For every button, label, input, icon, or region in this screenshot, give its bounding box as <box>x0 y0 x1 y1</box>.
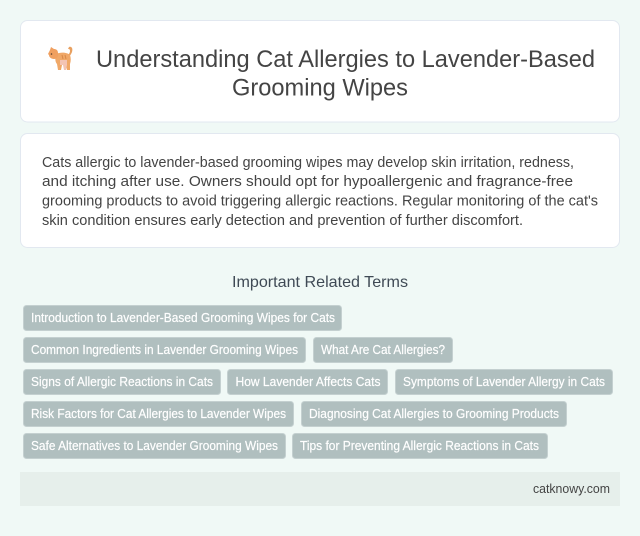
footer <box>20 472 620 506</box>
tag: How Lavender Affects Cats <box>236 375 380 389</box>
footer: catknowy.com <box>533 482 610 496</box>
text block: summary <box>42 155 598 229</box>
tag: Symptoms of Lavender Allergy in Cats <box>403 375 605 389</box>
tag: Safe Alternatives to Lavender Grooming Wipes <box>31 439 278 453</box>
tag: Common Ingredients in Lavender Grooming Wipes <box>31 343 298 357</box>
tag <box>396 370 612 394</box>
text block: summary: grooming products to avoid triggering allergic reactions. Regular monitoring of the cat's <box>42 194 598 210</box>
tag <box>314 338 452 362</box>
tag <box>228 370 388 394</box>
tag: Risk Factors for Cat Allergies to Lavender Wipes <box>31 407 286 421</box>
panel: title card <box>20 20 620 122</box>
tag <box>24 370 220 394</box>
text block: summary: skin condition ensures early detection and prevention of further discomfort. <box>42 213 523 229</box>
heading: related terms: Important Related Terms <box>232 274 408 291</box>
tag: Tips for Preventing Allergic Reactions in Cats <box>300 439 539 453</box>
tag <box>302 402 566 426</box>
tag <box>24 402 294 426</box>
tag <box>292 434 548 458</box>
icon: cat <box>48 47 72 70</box>
tag list <box>24 306 612 458</box>
heading <box>96 46 595 102</box>
tag <box>24 434 286 458</box>
tag: What Are Cat Allergies? <box>321 343 445 357</box>
heading: Grooming Wipes <box>232 74 408 102</box>
tag: Signs of Allergic Reactions in Cats <box>31 375 213 389</box>
panel: summary <box>20 134 620 248</box>
tag: Introduction to Lavender-Based Grooming Wipes for Cats <box>31 311 335 325</box>
tag <box>24 306 342 330</box>
text block: summary: and itching after use. Owners should opt for hypoallergenic and fragrance-free <box>42 174 573 190</box>
text block: summary: Cats allergic to lavender-based grooming wipes may develop skin irritation, redness, <box>42 155 574 171</box>
heading: Understanding Cat Allergies to Lavender-Based <box>96 46 595 73</box>
tag: Diagnosing Cat Allergies to Grooming Products <box>309 407 559 421</box>
tag <box>24 338 306 362</box>
